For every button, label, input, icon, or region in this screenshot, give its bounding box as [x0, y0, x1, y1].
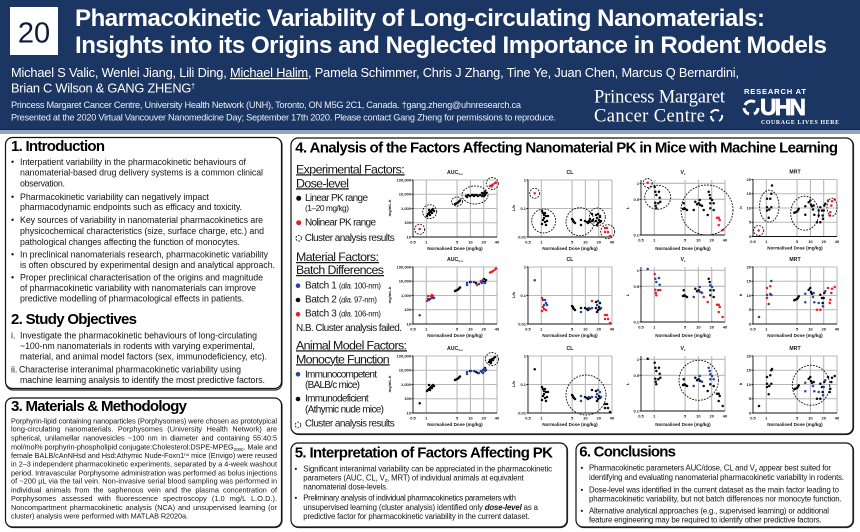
- chart: CL batch differences: 0.01: [518, 322, 527, 326]
- chart: AUC monocyte function: Normalised Dose (mg/kg): [427, 422, 483, 427]
- introduction bullet list: In preclinical nanomaterials research, pharmacokinetic variability: [20, 250, 269, 260]
- chart: MRT dose level: 1: [765, 239, 768, 244]
- introduction bullet list: predictive modelling of pharmacological effects in patients.: [20, 294, 244, 304]
- chart: CL dose level: 1: [540, 239, 543, 244]
- legend: material factors: Material Factors:: [296, 250, 379, 264]
- chart: MRT batch differences: 40: [835, 326, 840, 331]
- chart: MRT dose level: MRT: [789, 170, 801, 176]
- chart: MRT batch differences: 5: [749, 307, 752, 312]
- chart: CL monocyte function: 0.01: [518, 410, 527, 416]
- chart: AUC batch differences: AUC: [447, 257, 458, 263]
- chart: Vz monocyte function: 5: [684, 413, 687, 418]
- chart: CL monocyte function: 0.5: [525, 415, 532, 420]
- introduction bullet list: •: [11, 157, 14, 167]
- introduction bullet list: Proper preclinical characterisation of the origins and magnitude: [20, 273, 263, 283]
- legend: experimental factors: Cluster analysis results: [305, 233, 395, 244]
- methodology paragraph: spherical, unilamellar nanovesicles ~100 nm in diameter and containing 55:40:5: [11, 434, 277, 443]
- conclusions bullets: identifying and evaluating nanomaterial pharmacokinetic variability in rodents.: [589, 473, 844, 482]
- chart: CL dose level: 5: [571, 239, 574, 244]
- chart: Vz batch differences: 0.5: [638, 324, 645, 329]
- chart: Vz batch differences: 20: [709, 324, 715, 329]
- legend: material factors: Batch 2 (dia. 97-nm): [305, 294, 377, 305]
- introduction bullet list: •: [11, 215, 14, 225]
- chart: AUC monocyte function: 0-∞: [458, 348, 463, 352]
- study objectives list: Investigate the pharmacokinetic behaviours of long-circulating: [20, 331, 257, 341]
- methodology paragraph: Porphysomes assessed with fluorescence spectroscopy (1.0 mg/L L.O.D.).: [11, 494, 277, 503]
- chart: Vz monocyte function: [625, 346, 728, 427]
- chart: MRT dose level: h: [738, 206, 743, 209]
- methodology paragraph: period. Intravascular Porphysome administration was performed as bolus injections: [11, 468, 277, 477]
- legend: material factors: [296, 250, 402, 334]
- chart: AUC dose level: 20: [481, 239, 487, 244]
- chart: AUC batch differences: 20: [481, 326, 487, 331]
- chart: MRT monocyte function: 20: [821, 415, 827, 420]
- introduction bullet list: •: [11, 250, 14, 260]
- introduction bullet list: •: [11, 273, 14, 283]
- chart: Vz monocyte function: 0.1: [633, 408, 640, 414]
- chart: AUC dose level: 100,000: [397, 178, 412, 182]
- chart: MRT dose level: Normalised Dose (mg/kg): [767, 246, 823, 250]
- heading: Interpretation: 5. Interpretation of Factors Affecting PK: [295, 444, 553, 461]
- header banner: [0, 0, 860, 130]
- chart: AUC dose level: 40: [495, 239, 500, 244]
- chart: CL batch differences: 0.1: [520, 293, 527, 298]
- chart: AUC dose level: mg/mL.h: [387, 199, 392, 216]
- chart: Vz dose level: Normalised Dose (mg/kg): [655, 246, 711, 251]
- introduction bullet list: •: [11, 192, 14, 202]
- conclusions bullets: •: [580, 506, 584, 515]
- affiliation and presentation notes: [11, 100, 556, 123]
- methodology paragraph: [11, 416, 278, 520]
- introduction bullet list: of pharmacokinetic variability with nanomaterials can improve: [20, 283, 256, 293]
- legend: animal model factors: Cluster analysis results: [305, 419, 395, 430]
- methodology paragraph: female BALB/cAnNHsd and Hsd:Athymic Nude-Foxn1: [11, 451, 184, 460]
- legend: experimental factors: Experimental Factors:: [296, 162, 405, 176]
- heading: Introduction: 1. Introduction: [11, 138, 105, 155]
- chart: Vz batch differences: 5: [684, 324, 687, 329]
- chart: CL batch differences: 0.5: [525, 326, 532, 331]
- chart: MRT dose level: 5: [749, 220, 752, 225]
- chart: CL monocyte function: 1: [524, 354, 527, 358]
- chart: CL batch differences: 5: [571, 326, 574, 331]
- interpretation bullets: Significant interanimal variability can be appreciated in the pharmacokinetic: [303, 465, 552, 474]
- chart: CL monocyte function: 10: [583, 415, 588, 420]
- introduction bullet list: nanomaterial-based drug delivery systems is a common clinical: [20, 168, 263, 178]
- chart: AUC batch differences: 1,000: [401, 293, 412, 298]
- authors: Brian C Wilson & GANG ZHENG: [11, 81, 191, 96]
- chart: Vz monocyte function: 0.5: [638, 413, 645, 418]
- chart: MRT dose level: 10: [747, 206, 752, 210]
- chart: CL dose level: L/h: [511, 204, 516, 211]
- methodology paragraph: 2000: [234, 447, 244, 452]
- legend: material factors: N.B. Cluster analysis failed.: [296, 323, 402, 334]
- legend: experimental factors: Dose-level: [296, 176, 349, 190]
- chart: Vz monocyte function: z: [684, 348, 686, 352]
- conclusions bullets: •: [580, 486, 584, 495]
- chart: MRT dose level: 20: [747, 177, 752, 182]
- chart: AUC batch differences: 100,000: [397, 264, 412, 270]
- interpretation bullets: unsupervised learning (cluster analysis) identified only dose-level as a: [303, 503, 539, 512]
- chart: Vz monocyte function: 10: [696, 413, 701, 418]
- study objectives list: ~100-nm nanomaterials in rodents with varying experimental,: [20, 341, 255, 351]
- conclusions bullets: Dose-level was identified in the current dataset as the main factor leading to: [589, 486, 840, 495]
- chart: CL monocyte function: 40: [610, 415, 615, 420]
- chart: MRT monocyte function: 15: [747, 368, 752, 373]
- chart: MRT monocyte function: 10: [747, 382, 752, 387]
- chart: AUC dose level: 10: [468, 239, 473, 244]
- chart: AUC monocyte function: 100: [404, 396, 412, 401]
- heading: Materials & Methodology: 3. Materials & Methodology: [11, 398, 188, 415]
- methodology paragraph: individual animals from the saphenous vein and the plasma concentration of: [11, 485, 278, 494]
- chart: AUC batch differences: 10,000: [399, 279, 412, 284]
- methodology paragraph: mol/mol% porphyrin-phospholipid conjugate:Cholesterol:DSPE-MPEG: [11, 442, 234, 451]
- title: [75, 5, 827, 59]
- chart: MRT batch differences: h: [738, 293, 743, 296]
- chart: MRT dose level: 0.5: [750, 239, 757, 244]
- study objectives list: material, and animal model factors (sex, immunodeficiency, etc).: [20, 352, 267, 362]
- chart: MRT batch differences: 0.5: [750, 326, 757, 331]
- chart: AUC monocyte function: mg/mL.h: [387, 375, 392, 392]
- chart: CL batch differences: L/h: [511, 291, 516, 298]
- chart: AUC monocyte function: 40: [495, 415, 500, 420]
- interpretation bullets: •: [294, 494, 298, 503]
- chart: Vz batch differences: Normalised Dose (mg/kg): [655, 333, 711, 338]
- logo: Princess Margaret Cancer Centre: Princess Margaret: [594, 88, 726, 108]
- chart: Vz batch differences: L: [625, 293, 630, 296]
- introduction bullet list: pathological changes affecting the function of monocytes.: [20, 237, 240, 247]
- chart: MRT dose level: 5: [796, 239, 799, 244]
- logo: Research at UHN: COURAGE LIVES HERE: [761, 120, 839, 126]
- chart: MRT monocyte function: 0: [749, 410, 752, 416]
- chart: AUC monocyte function: 20: [481, 415, 487, 420]
- chart: Vz monocyte function: 40: [723, 413, 728, 418]
- chart: MRT batch differences: [738, 257, 840, 338]
- chart: Vz batch differences: 1: [637, 268, 640, 273]
- chart: AUC monocyte function: 10: [407, 410, 412, 416]
- chart: AUC batch differences: 0.5: [410, 326, 417, 331]
- study objectives list: machine learning analysis to identify the most predictive factors.: [20, 375, 265, 385]
- chart: CL dose level: 0.01: [518, 234, 527, 240]
- logo: Research at UHN: UHN: [760, 94, 806, 120]
- study objectives list: [11, 331, 267, 385]
- chart: AUC batch differences: Normalised Dose (mg/kg): [427, 333, 483, 338]
- introduction bullet list: is often obscured by experimental design and analytical approach.: [20, 260, 275, 270]
- chart: CL dose level: [511, 170, 615, 251]
- panel: analysis of factors: [291, 138, 854, 434]
- chart: MRT batch differences: 5: [796, 326, 799, 331]
- conclusions bullets: [580, 464, 844, 524]
- study objectives list: Characterise interanimal pharmacokinetic variability using: [19, 364, 241, 374]
- panel: conclusions: [576, 443, 854, 528]
- chart: CL dose level: Normalised Dose (mg/kg): [542, 246, 598, 251]
- chart: CL monocyte function: CL: [567, 346, 574, 352]
- panel: introduction and study objectives: [6, 138, 282, 390]
- chart: CL dose level: 40: [610, 239, 615, 244]
- chart: Vz batch differences: 0.5: [633, 284, 640, 289]
- panel: interpretation of factors: [291, 443, 568, 528]
- chart: MRT dose level: 10: [808, 239, 813, 244]
- legend: animal model factors: [295, 338, 407, 430]
- chart: AUC monocyte function: 1: [425, 415, 428, 420]
- interpretation bullets: , MRT) of individual animals at equivalent: [387, 474, 525, 483]
- chart: CL dose level: CL: [567, 170, 574, 176]
- chart: CL monocyte function: L/h: [511, 380, 516, 387]
- legend: material factors: Batch Differences: [296, 263, 384, 277]
- chart: MRT batch differences: 10: [808, 326, 813, 331]
- chart: Vz dose level: 10: [696, 237, 701, 242]
- chart: CL dose level: 10: [583, 239, 588, 244]
- chart: AUC monocyte function: 5: [456, 415, 459, 420]
- chart: AUC dose level: 10: [407, 234, 412, 240]
- chart: Vz dose level: 1: [653, 237, 656, 242]
- legend: experimental factors: (1–20 mg/kg): [305, 203, 349, 213]
- title: Insights into its Origins and Neglected Importance in Rodent Models: [75, 32, 827, 59]
- chart: MRT monocyte function: 5: [749, 396, 752, 401]
- chart: AUC dose level: 100: [404, 220, 412, 225]
- logo: Research at UHN: [744, 87, 839, 126]
- chart: AUC monocyte function: AUC: [447, 346, 458, 352]
- chart: MRT monocyte function: 20: [747, 354, 752, 358]
- chart: CL dose level: 20: [596, 239, 602, 244]
- conclusions bullets: z: [755, 468, 758, 474]
- chart: MRT batch differences: 10: [747, 293, 752, 298]
- legend: experimental factors: [296, 162, 405, 244]
- chart: AUC dose level: 0.5: [410, 239, 417, 244]
- introduction bullet list: Interpatient variability in the pharmacokinetic behaviours of: [20, 157, 247, 167]
- chart: CL batch differences: 20: [596, 326, 602, 331]
- chart: MRT batch differences: 15: [747, 279, 752, 284]
- chart: Vz batch differences: 0.1: [633, 320, 640, 324]
- chart: CL monocyte function: 20: [596, 415, 602, 420]
- chart: CL batch differences: 10: [583, 326, 588, 331]
- chart: MRT monocyte function: 0.5: [750, 415, 757, 420]
- conclusions bullets: •: [580, 464, 584, 473]
- legend: material factors: Batch 3 (dia. 106-nm): [305, 309, 381, 320]
- introduction bullet list: physicochemical characteristics (size, surface charge, etc.) and: [20, 226, 264, 236]
- study objectives list: i.: [11, 331, 15, 341]
- chart: MRT dose level: 20: [821, 239, 827, 244]
- legend: animal model factors: Immunocompetent: [305, 369, 377, 380]
- chart: AUC monocyte function: 0.5: [410, 415, 417, 420]
- chart: MRT dose level: 0: [749, 234, 752, 239]
- chart: AUC batch differences: 1: [425, 326, 428, 331]
- chart: MRT batch differences: Normalised Dose (mg/kg): [767, 333, 823, 338]
- legend: experimental factors: Linear PK range: [305, 193, 368, 204]
- poster number box: 20: [18, 18, 50, 50]
- chart: CL monocyte function: Normalised Dose (mg/kg): [542, 422, 598, 427]
- methodology paragraph: Porphyrin-lipid containing nanoparticles (Porphysomes) were chosen as prototypical: [11, 416, 277, 425]
- chart: MRT monocyte function: 10: [808, 415, 813, 420]
- chart: MRT batch differences: MRT: [789, 257, 801, 263]
- chart: MRT monocyte function: h: [738, 382, 743, 385]
- chart: AUC dose level: 1,000: [401, 206, 412, 211]
- legend: animal model factors: (BALB/c mice): [305, 380, 360, 391]
- chart: Vz dose level: 0.5: [633, 197, 640, 202]
- chart: Vz dose level: L: [625, 206, 630, 209]
- affiliation and presentation notes: Princess Margaret Cancer Centre, University Health Network (UNH), Toronto, ON M5G 2C1, Canada. †gang.zheng@uhnresearch.ca: [11, 100, 522, 110]
- legend: material factors: Batch 1 (dia. 100-nm): [305, 280, 381, 291]
- chart: Vz monocyte function: 1: [637, 357, 640, 362]
- chart: Vz monocyte function: Normalised Dose (mg/kg): [655, 422, 711, 427]
- legend: animal model factors: Animal Model Factors:: [296, 338, 407, 352]
- authors: Michael S Valic, Wenlei Jiang, Lili Ding, Michael Halim, Pamela Schimmer, Chris J Zhang, Tine Ye, Juan Chen, Marcus Q Bernardini,: [11, 65, 739, 80]
- introduction bullet list: Key sources of variability in nanomaterial pharmacokinetics are: [20, 215, 263, 225]
- chart: AUC monocyte function: [387, 346, 500, 427]
- chart: AUC dose level: [387, 170, 500, 251]
- chart: Vz dose level: V: [681, 170, 684, 176]
- affiliation and presentation notes: Presented at the 2020 Virtual Vancouver Nanomedicine Day; September 17th 2020. Please contact Gang Zheng for permissions to reproduce.: [11, 113, 556, 123]
- chart: CL dose level: 1: [524, 178, 527, 182]
- legend: animal model factors: Monocyte Function: [296, 352, 390, 366]
- chart: AUC dose level: 0-∞: [458, 172, 463, 176]
- chart: CL dose level: 0.5: [525, 239, 532, 244]
- poster number box: [10, 7, 58, 55]
- chart: Vz monocyte function: 0.5: [633, 373, 640, 378]
- chart: Vz monocyte function: 20: [709, 413, 715, 418]
- chart: MRT batch differences: 20: [821, 326, 827, 331]
- heading: Study Objectives: 2. Study Objectives: [11, 311, 137, 328]
- interpretation bullets: [294, 465, 552, 521]
- chart: CL dose level: 0.1: [520, 206, 527, 211]
- methodology paragraph: of ~200 µL via the tail vein. Non-invasive serial blood sampling was performed in: [11, 477, 277, 486]
- chart: CL batch differences: [511, 257, 615, 338]
- chart: AUC batch differences: 10: [468, 326, 473, 331]
- chart: Vz dose level: 0.5: [638, 237, 645, 242]
- conclusions bullets: feature engineering may be required to identify other predictive factors.: [589, 515, 822, 524]
- chart: MRT dose level: 15: [747, 191, 752, 196]
- chart: Vz dose level: 1: [637, 181, 640, 186]
- chart: MRT monocyte function: [738, 346, 840, 427]
- chart: Vz dose level: z: [684, 172, 686, 176]
- chart: MRT monocyte function: 40: [835, 415, 840, 420]
- interpretation bullets: nanomaterial dose-levels.: [303, 482, 388, 491]
- chart: AUC batch differences: 100: [404, 307, 412, 312]
- interpretation bullets: z: [385, 478, 388, 484]
- chart: MRT dose level: 40: [835, 239, 840, 244]
- chart: AUC dose level: Normalised Dose (mg/kg): [427, 246, 483, 251]
- chart: CL monocyte function: 0.1: [520, 382, 527, 387]
- legend: experimental factors: Nolinear PK range: [305, 218, 376, 229]
- chart: MRT batch differences: 1: [765, 326, 768, 331]
- conclusions bullets: Pharmacokinetic parameters AUC/dose, CL and V: [589, 464, 755, 473]
- methodology paragraph: Noncompartment pharmacokinetic analysis (NCA) and unsupervised learning (or: [11, 503, 278, 512]
- chart: AUC batch differences: 0-∞: [458, 259, 463, 263]
- chart: AUC monocyte function: 10,000: [399, 368, 412, 373]
- chart: CL batch differences: CL: [567, 257, 574, 263]
- introduction bullet list: [11, 157, 275, 304]
- interpretation bullets: predictive factor for pharmacokinetic variability in the current dataset.: [303, 512, 530, 521]
- chart: Vz monocyte function: 1: [653, 413, 656, 418]
- chart: Vz batch differences: 1: [653, 324, 656, 329]
- interpretation bullets: Preliminary analysis of individual pharmacokinetics parameters with: [303, 494, 516, 503]
- chart: AUC batch differences: mg/mL.h: [387, 286, 392, 303]
- chart: MRT monocyte function: Normalised Dose (mg/kg): [767, 422, 823, 427]
- logo: Princess Margaret Cancer Centre: [594, 88, 726, 127]
- introduction bullet list: pharmacodynamic endpoints such as efficacy and toxicity.: [20, 202, 242, 212]
- chart: Vz dose level: 5: [684, 237, 687, 242]
- chart: Vz dose level: 20: [709, 237, 715, 242]
- title: Pharmacokinetic Variability of Long-circulating Nanomaterials:: [75, 5, 765, 32]
- chart: AUC monocyte function: 100,000: [397, 354, 412, 358]
- chart: AUC monocyte function: 1,000: [401, 382, 412, 387]
- chart: CL batch differences: 1: [524, 264, 527, 270]
- interpretation bullets: •: [294, 465, 298, 474]
- chart: Vz monocyte function: V: [681, 346, 684, 352]
- chart: CL monocyte function: 5: [571, 415, 574, 420]
- methodology paragraph: mice (Envigo) were reused: [189, 451, 277, 460]
- chart: AUC dose level: 10,000: [399, 192, 412, 197]
- chart: CL batch differences: Normalised Dose (mg/kg): [542, 333, 598, 338]
- legend: animal model factors: (Athymic nude mice): [305, 405, 384, 416]
- chart: Vz dose level: [625, 170, 733, 251]
- chart: AUC batch differences: [387, 257, 500, 338]
- methodology paragraph: . Male and: [243, 442, 277, 451]
- chart: CL monocyte function: [511, 346, 615, 427]
- logo: Research at UHN: RESEARCH AT: [744, 87, 806, 96]
- authors: [11, 65, 739, 96]
- chart: AUC monocyte function: 10: [468, 415, 473, 420]
- introduction bullet list: observation.: [20, 178, 65, 188]
- chart: Vz dose level: 0.1: [633, 232, 640, 238]
- methodology paragraph: cluster) analysis were performed with MATLAB R2020a.: [11, 511, 188, 520]
- interpretation bullets: parameters (AUC, CL, V: [303, 474, 385, 483]
- panel: materials and methodology: [6, 398, 282, 528]
- chart: AUC batch differences: 40: [495, 326, 500, 331]
- chart: Vz batch differences: V: [681, 257, 684, 263]
- chart: MRT monocyte function: 5: [796, 415, 799, 420]
- conclusions bullets: appear best suited for: [757, 464, 831, 473]
- study objectives list: ii.: [11, 364, 17, 374]
- chart: CL batch differences: 1: [540, 326, 543, 331]
- chart: Vz monocyte function: L: [625, 382, 630, 385]
- chart: AUC batch differences: 5: [456, 326, 459, 331]
- chart: MRT batch differences: 0: [749, 322, 752, 326]
- legend: animal model factors: Immunodeficient: [305, 394, 369, 405]
- chart: AUC dose level: 5: [456, 239, 459, 244]
- chart: AUC dose level: 1: [425, 239, 428, 244]
- chart: Vz batch differences: [625, 257, 728, 338]
- chart: CL batch differences: 40: [610, 326, 615, 331]
- heading: Conclusions: 6. Conclusions: [579, 444, 676, 461]
- introduction bullet list: Pharmacokinetic variability can negatively impact: [20, 192, 210, 202]
- chart: AUC dose level: AUC: [447, 170, 458, 176]
- chart: MRT dose level: [738, 170, 840, 250]
- chart: MRT monocyte function: MRT: [789, 346, 801, 352]
- methodology paragraph: in 2–3 independent pharmacokinetic experiments, separated by a 4-week washout: [11, 460, 277, 469]
- chart: Vz dose level: 40: [723, 237, 728, 242]
- chart: AUC batch differences: 10: [407, 322, 412, 326]
- chart: MRT batch differences: 20: [747, 264, 752, 270]
- chart: CL monocyte function: 1: [540, 415, 543, 420]
- conclusions bullets: Alternative analytical approaches (e.g., supervised learning) or additional: [589, 506, 829, 515]
- authors: †: [191, 84, 195, 91]
- chart: Vz batch differences: z: [684, 259, 686, 263]
- chart: Vz batch differences: 10: [696, 324, 701, 329]
- logo: Princess Margaret Cancer Centre: Cancer Centre: [594, 107, 705, 127]
- methodology paragraph: nu: [184, 452, 190, 457]
- methodology paragraph: long-circulating nanomaterials. Porphysomes (University Health Network) are: [11, 425, 277, 434]
- heading: Analysis of the Factors: 4. Analysis of the Factors Affecting Nanomaterial PK in Mice with Machine Learning: [295, 140, 838, 157]
- chart: MRT monocyte function: 1: [765, 415, 768, 420]
- chart: Vz batch differences: 40: [723, 324, 728, 329]
- conclusions bullets: pharmacokinetic variability, but not batch differences nor monocyte function.: [589, 494, 842, 503]
